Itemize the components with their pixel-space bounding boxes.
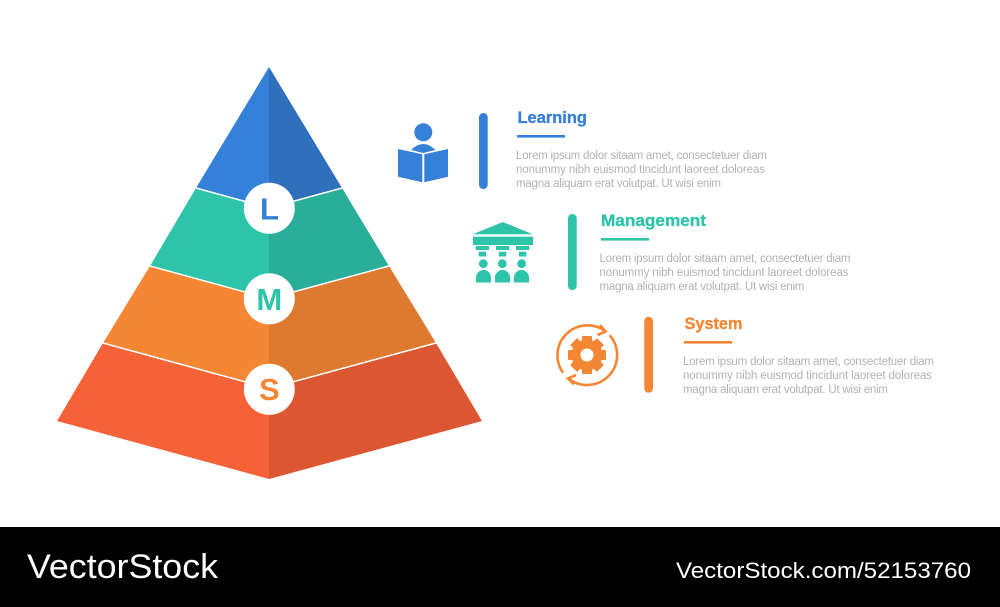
pyramid tier: base (57, 343, 482, 479)
pyramid tier: management (150, 188, 389, 299)
footer image id: VectorStock.com/52153760 (676, 558, 971, 583)
badge: M: M (256, 282, 282, 317)
body text: magna aliquam erat volutpat. Ut wisi enim (600, 281, 804, 293)
heading: Learning (518, 109, 587, 127)
body text: magna aliquam erat volutpat. Ut wisi enim (516, 178, 721, 190)
body text: Lorem ipsum dolor sitaam amet, consectetuer diam (683, 356, 934, 368)
accent bar (568, 214, 577, 290)
body text: nonummy nibh euismod tincidunt laoreet doloreas (600, 267, 849, 279)
badge: S (244, 364, 295, 415)
body text: nonummy nibh euismod tincidunt laoreet doloreas (683, 370, 932, 382)
panel: system (557, 315, 937, 396)
footer band (0, 527, 1000, 607)
badge: L (244, 183, 295, 234)
pyramid tier: learning (196, 67, 342, 208)
panel: learning (398, 109, 770, 190)
footer logo text: VectorStock (27, 548, 219, 586)
heading underline (601, 238, 649, 241)
panel: management (473, 212, 853, 293)
icon: person reading book (398, 123, 448, 182)
body text: nonummy nibh euismod tincidunt laoreet doloreas (516, 164, 765, 176)
badge: M (244, 273, 295, 324)
pyramid tier: system (103, 266, 436, 388)
heading: Management (601, 212, 707, 230)
badge: S: S (259, 372, 280, 407)
body text: Lorem ipsum dolor sitaam amet, consectetuer diam (600, 253, 850, 265)
body text: magna aliquam erat volutpat. Ut wisi enim (683, 384, 888, 396)
heading: System (684, 315, 742, 333)
icon: gear with cycle arrows (557, 325, 617, 385)
badge: L: L (260, 191, 279, 226)
accent bar (644, 317, 653, 393)
accent bar (479, 113, 488, 189)
heading underline (684, 341, 732, 344)
pyramid chart (57, 67, 482, 479)
icon: institution with people (473, 222, 533, 282)
heading underline (517, 135, 565, 138)
tier separator lines (103, 188, 436, 388)
body text: Lorem ipsum dolor sitaam amet, consectetuer diam (516, 150, 767, 162)
